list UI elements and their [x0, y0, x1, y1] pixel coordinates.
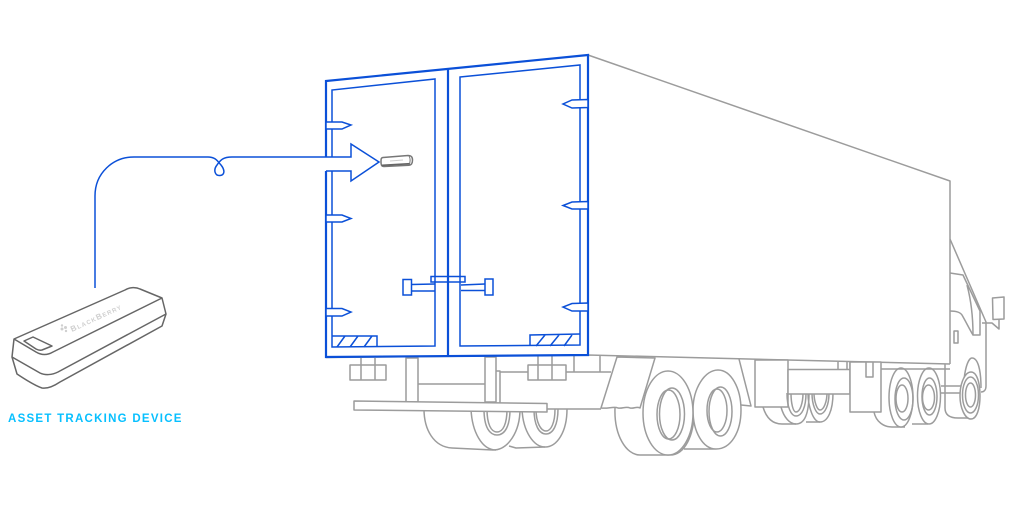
side mirror [982, 297, 1004, 329]
tandem rear wheel [684, 370, 741, 449]
rear right wheel [509, 409, 567, 448]
device top edge [14, 298, 162, 354]
bumper supports [326, 355, 950, 409]
device on door [381, 156, 412, 166]
rear bumper [354, 401, 547, 412]
device body [12, 288, 166, 388]
middle wheels [763, 393, 833, 424]
fender and side box [739, 359, 788, 407]
cab [941, 239, 986, 419]
device seam [12, 314, 166, 375]
device caption: ASSET TRACKING DEVICE [8, 413, 183, 425]
left door hinges [326, 122, 351, 316]
left hatch [332, 336, 377, 347]
underrun chassis [547, 408, 601, 410]
front tandem wheel back [615, 408, 694, 455]
frame details [838, 362, 850, 370]
tank box [850, 362, 881, 412]
left door panel [332, 79, 435, 347]
side rail [788, 370, 850, 394]
rear left wheel [424, 409, 520, 450]
arrow pointing to device [95, 144, 379, 288]
door centre seam [447, 69, 449, 357]
asset tracking device illustration [12, 288, 166, 388]
truck box side [588, 55, 950, 364]
device logo: BlackBerry [69, 302, 123, 334]
right door hinges [563, 100, 588, 311]
truck chassis and wheels [326, 239, 1004, 455]
device logo mark [60, 324, 67, 332]
rear side wheels [874, 368, 940, 427]
tandem front wheel [643, 371, 693, 455]
device window [24, 337, 52, 350]
door frame [326, 55, 588, 357]
right hatch [530, 334, 580, 346]
right door panel [460, 65, 580, 346]
left bracket [350, 358, 386, 380]
door handles [403, 276, 493, 295]
rear doors [326, 55, 588, 357]
mud flap [601, 357, 655, 408]
right bracket [528, 356, 566, 380]
tank latch [866, 362, 873, 377]
